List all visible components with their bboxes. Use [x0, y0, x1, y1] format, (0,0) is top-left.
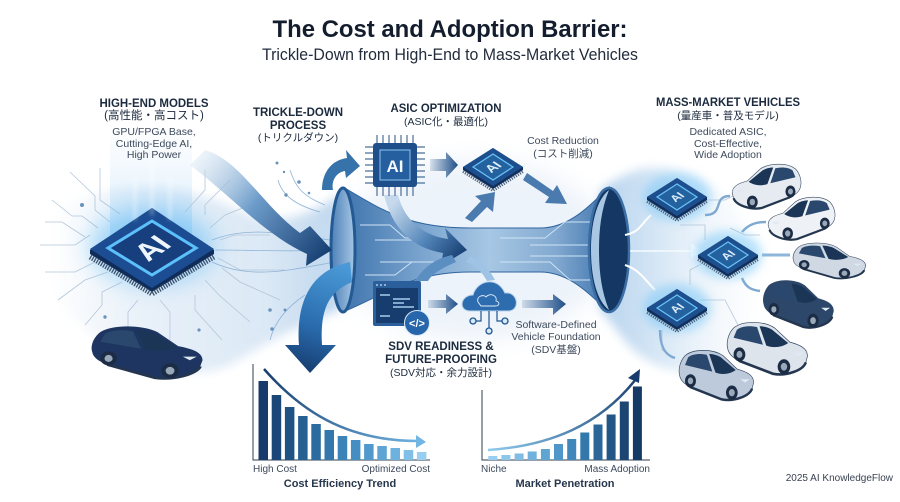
- text: trickle-down process: (トリクルダウン): [258, 131, 338, 144]
- right data stream background: [600, 168, 763, 371]
- text: ASIC optimization: [390, 103, 502, 128]
- icon: mass-market chip 1: [643, 173, 711, 221]
- text: ASIC optimization: (ASIC化・最適化): [404, 115, 488, 128]
- bar chart: cost efficiency trend: Cost Efficiency Trend: [284, 478, 396, 490]
- central light stream: [230, 244, 660, 256]
- centre pale background: [340, 160, 610, 340]
- text: software-defined vehicle foundation: Software-Defined: [515, 319, 597, 331]
- bar chart: market penetration: [481, 369, 650, 490]
- icon: mass-market chip 2: AI: [718, 249, 739, 262]
- text: trickle-down process: TRICKLE-DOWN: [253, 107, 343, 119]
- arrow: chip to iso chip: [430, 152, 458, 178]
- icon: main AI chip: AI: [127, 231, 179, 266]
- arrow: code to cloud: [428, 294, 458, 314]
- text: high-end models: GPU/FPGA Base,: [112, 126, 196, 138]
- text: SDV readiness: (SDV対応・余力設計): [390, 366, 492, 379]
- text: high-end models: (高性能・高コスト): [104, 108, 204, 122]
- bar chart: cost efficiency trend: High Cost: [253, 464, 297, 475]
- icon: main AI chip: [90, 208, 214, 294]
- text: mass-market vehicles: Wide Adoption: [694, 149, 762, 161]
- icon: mass-market chip 3: AI: [667, 302, 688, 315]
- icon: mass-market chip 2: [694, 231, 762, 279]
- circuit traces around main chip: [40, 168, 335, 345]
- arrow: cloud to funnel: [522, 294, 566, 315]
- icon: ASIC chip flat: AI: [386, 157, 404, 176]
- arrow: funnel to cloud: [466, 256, 495, 281]
- arrow: ASIC chip to funnel centre: [384, 195, 467, 266]
- main chip glow: [90, 208, 214, 284]
- text: ASIC optimization: ASIC OPTIMIZATION: [390, 103, 502, 115]
- chip vertical glow lines: [135, 165, 170, 220]
- text: high-end models: [100, 98, 209, 161]
- icon: ASIC chip flat: [365, 135, 425, 196]
- icon: high-end car: [92, 326, 203, 378]
- text: software-defined vehicle foundation: Vehicle Foundation: [511, 331, 601, 343]
- text: trickle-down process: PROCESS: [270, 120, 326, 132]
- icon: ASIC chip isometric: [463, 148, 523, 190]
- icon: code window: </>: [409, 318, 425, 330]
- icon: mass-market chip 3: [643, 284, 711, 332]
- icon: car 2: [768, 197, 835, 240]
- text: mass-market vehicles: Cost-Effective,: [694, 138, 762, 150]
- text: mass-market vehicles: MASS-MARKET VEHICLES: [656, 97, 800, 109]
- icon: car 4: [763, 280, 834, 328]
- arrow: curved up to ASIC chip: [322, 150, 360, 190]
- arrow: curved down to cost chart: [285, 262, 352, 373]
- icon: code window: [373, 281, 430, 336]
- bar chart: market penetration: Market Penetration: [515, 478, 615, 490]
- icon: mass-market chip 1: AI: [667, 191, 688, 204]
- text: SDV readiness: [385, 341, 497, 379]
- bar chart: cost efficiency trend: Optimized Cost: [362, 464, 430, 475]
- text: mass-market vehicles: Dedicated ASIC,: [689, 126, 767, 138]
- chip light beam: [110, 130, 192, 240]
- text: trickle-down process: [253, 107, 343, 144]
- text: high-end models: Cutting-Edge AI,: [116, 138, 192, 150]
- funnel circuit lines: [360, 222, 592, 280]
- funnel: [230, 187, 660, 312]
- funnel left mouth: [331, 188, 355, 312]
- text: SDV readiness: FUTURE-PROOFING: [385, 354, 497, 366]
- subtitle: Trickle-Down from High-End to Mass-Market Vehicles: [262, 45, 638, 64]
- right chip flows: [625, 190, 790, 358]
- funnel right mouth: [589, 188, 629, 312]
- text: mass-market vehicles: (量産車・普及モデル): [677, 109, 779, 122]
- bar chart: cost efficiency trend: [253, 364, 430, 490]
- icon: car 3: [793, 243, 866, 278]
- icon: car 1: [732, 164, 801, 209]
- text: SDV readiness: SDV READINESS &: [388, 341, 494, 353]
- arrow: iso chip down to funnel: [523, 173, 567, 204]
- icon: ASIC chip isometric: AI: [481, 159, 505, 175]
- text: mass-market vehicles: [656, 97, 800, 161]
- bar chart: market penetration: Niche: [481, 464, 507, 475]
- funnel body: [343, 187, 609, 312]
- bar chart: market penetration: Mass Adoption: [584, 464, 650, 475]
- text: cost reduction: Cost Reduction: [527, 135, 599, 147]
- text: software-defined vehicle foundation: [511, 319, 601, 356]
- title: The Cost and Adoption Barrier:: [272, 16, 628, 43]
- text: software-defined vehicle foundation: (SDV基盤): [531, 343, 581, 356]
- floating data dots: [80, 162, 310, 332]
- arrow: trickle-down into funnel: [190, 150, 332, 266]
- watermark: 2025 AI KnowledgeFlow: [786, 473, 894, 484]
- icon: cloud: [462, 282, 516, 334]
- text: high-end models: HIGH-END MODELS: [100, 98, 209, 110]
- arrow: funnel up to iso chip: [465, 192, 495, 222]
- icon: car 6: [679, 350, 754, 400]
- left data stream background: [50, 187, 340, 373]
- text: cost reduction: [527, 135, 599, 160]
- text: high-end models: High Power: [127, 149, 182, 161]
- arrow: code to funnel: [415, 255, 456, 281]
- text: cost reduction: (コスト削減): [533, 147, 593, 160]
- icon: car 5: [727, 322, 807, 374]
